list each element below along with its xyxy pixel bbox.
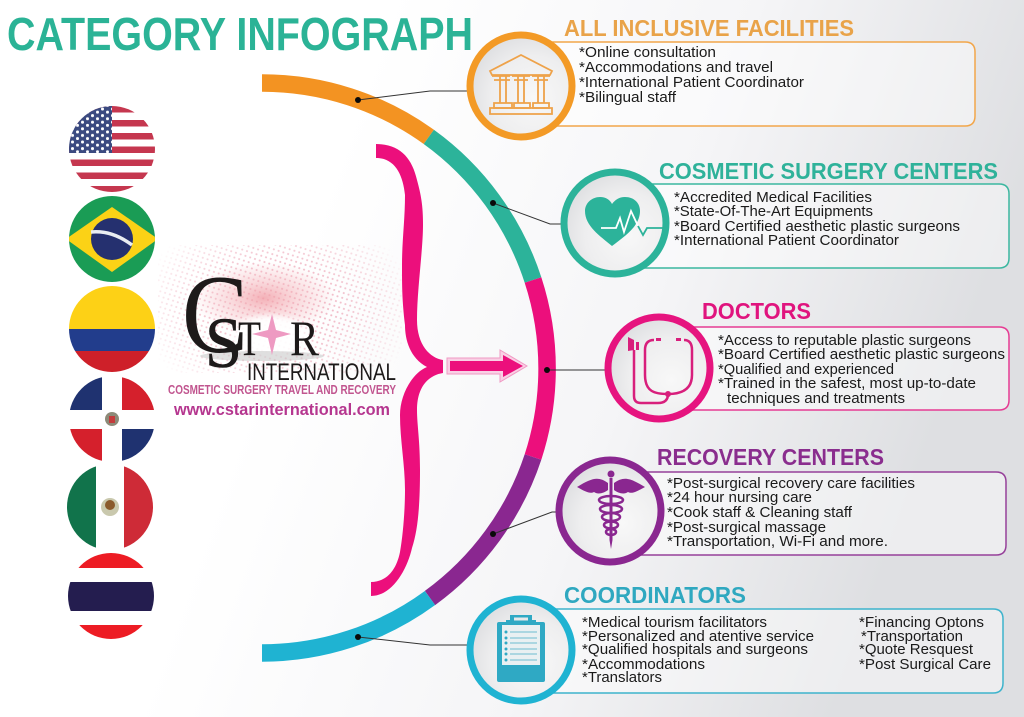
- panel: recovery centers: [559, 444, 1006, 562]
- heading: ALL INCLUSIVE FACILITIES: [564, 15, 854, 41]
- flags column: [66, 106, 158, 639]
- circle icon: caduceus: [559, 460, 661, 562]
- body text left column: *Qualified hospitals and surgeons: [582, 641, 808, 658]
- logo dotted halo: [158, 245, 402, 373]
- heading: COSMETIC SURGERY CENTERS: [659, 158, 998, 184]
- panel: cosmetic surgery centers: [564, 158, 1009, 274]
- logo tagline: COSMETIC SURGERY TRAVEL AND RECOVERY: [168, 382, 396, 397]
- body text: *Post-surgical massage: [667, 519, 826, 536]
- body text: *Accommodations and travel: [579, 59, 773, 76]
- circle icon: heart: [564, 172, 666, 274]
- body text: *Cook staff & Cleaning staff: [667, 504, 853, 521]
- logo wordmark: [182, 253, 320, 383]
- body text: [718, 332, 1005, 407]
- body text: *24 hour nursing care: [667, 489, 812, 506]
- body text right column: [859, 614, 991, 673]
- body text left column: *Translators: [582, 669, 662, 686]
- arc segment: teal: [429, 137, 533, 280]
- logo wordmark: C: [182, 253, 248, 377]
- arc segment: blue: [262, 598, 430, 653]
- circle icon: building: [470, 35, 572, 137]
- flag: United States: [69, 106, 155, 193]
- logo url: www.cstarinternational.com: [173, 400, 390, 419]
- body text: *Board Certified aesthetic plastic surgeons: [674, 218, 960, 235]
- text box: [625, 184, 1009, 268]
- body text: *Online consultation: [579, 44, 716, 61]
- flag: Colombia: [69, 286, 155, 373]
- body text: *Bilingual staff: [579, 89, 677, 106]
- body text: *International Patient Coordinator: [674, 232, 899, 249]
- body text: techniques and treatments: [727, 390, 905, 407]
- logo wordmark: T: [238, 310, 261, 366]
- heading: RECOVERY CENTERS: [657, 444, 884, 470]
- arc segment: pink: [533, 280, 547, 457]
- body text right column: *Financing Optons: [859, 614, 984, 631]
- panel: coordinators: [470, 582, 1003, 701]
- text box: [530, 42, 975, 126]
- text box: [530, 609, 1003, 693]
- logo wordmark: R: [290, 310, 320, 366]
- body text: [667, 475, 915, 550]
- flag: Mexico: [67, 464, 153, 550]
- body text: *State-Of-The-Art Equipments: [674, 203, 873, 220]
- body text left column: *Medical tourism facilitators: [582, 614, 767, 631]
- arc segment: orange: [262, 83, 429, 137]
- logo international: INTERNATIONAL: [247, 359, 396, 386]
- body text: *Qualified and experienced: [718, 361, 894, 378]
- circle icon: stethoscope: [608, 317, 710, 419]
- logo: CStar International: [158, 245, 402, 419]
- segmented arc: [262, 83, 547, 653]
- body text: *Accredited Medical Facilities: [674, 189, 872, 206]
- flag: Brazil: [66, 196, 158, 283]
- panel: all inclusive facilities: [470, 15, 975, 137]
- body text left column: *Accommodations: [582, 656, 705, 673]
- heading: COORDINATORS: [564, 582, 746, 608]
- title: CATEGORY INFOGRAPH: [7, 8, 473, 60]
- arc segment: purple: [430, 457, 533, 598]
- arrow: [447, 350, 527, 382]
- flag: Thailand: [68, 553, 154, 639]
- body text left column: [582, 614, 814, 686]
- flag: Dominican Republic: [69, 376, 155, 463]
- connector lines: [355, 91, 608, 645]
- body text right column: *Transportation: [861, 628, 963, 645]
- body text right column: *Post Surgical Care: [859, 656, 991, 673]
- body text: *Access to reputable plastic surgeons: [718, 332, 971, 349]
- curly brace: [371, 144, 443, 596]
- body text left column: *Personalized and atentive service: [582, 628, 814, 645]
- body text: *Board Certified aesthetic plastic surgeons: [718, 346, 1005, 363]
- heading: DOCTORS: [702, 298, 811, 324]
- body text right column: *Quote Resquest: [859, 641, 974, 658]
- body text: *Post-surgical recovery care facilities: [667, 475, 915, 492]
- body text: [579, 44, 804, 106]
- panel: doctors: [608, 298, 1009, 419]
- body text: *Transportation, Wi-Fi and more.: [667, 533, 888, 550]
- logo wordmark: S: [205, 303, 242, 383]
- body text: [674, 189, 960, 249]
- body text: *International Patient Coordinator: [579, 74, 804, 91]
- circle icon: clipboard: [470, 599, 572, 701]
- text box: [620, 472, 1006, 555]
- logo star: [252, 314, 291, 355]
- text box: [665, 327, 1009, 410]
- body text: *Trained in the safest, most up-to-date: [718, 375, 976, 392]
